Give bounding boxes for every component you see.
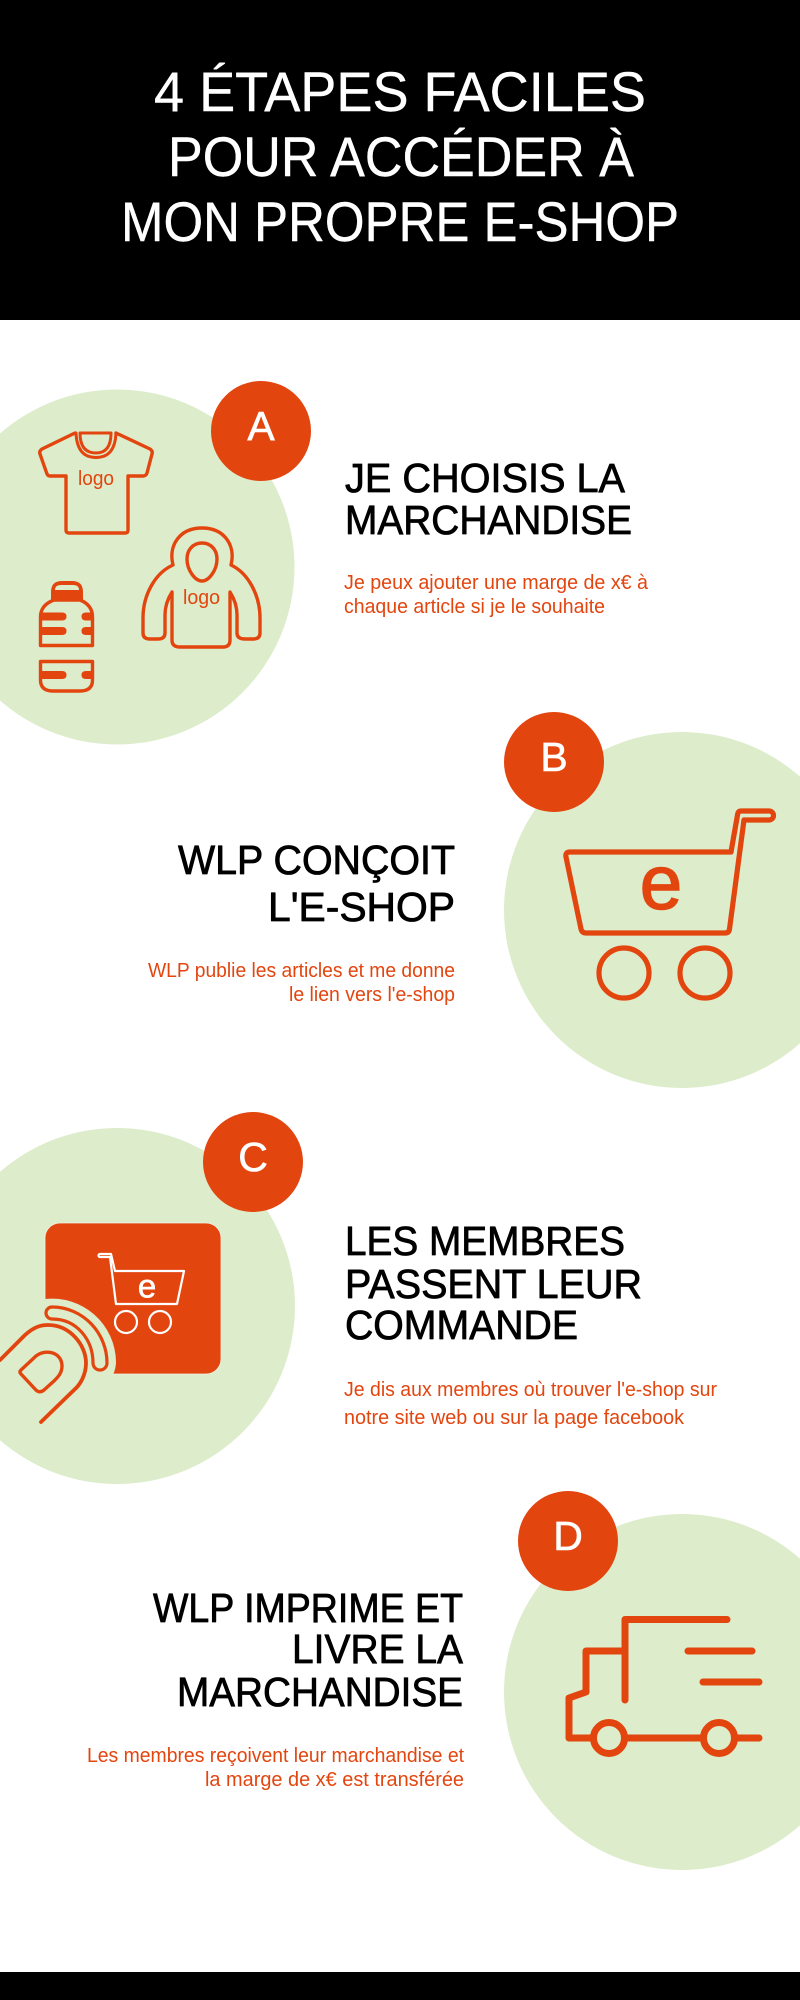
badge B: B xyxy=(540,734,568,780)
badge D xyxy=(518,1491,618,1591)
heading A: MARCHANDISE xyxy=(345,497,632,543)
heading D: MARCHANDISE xyxy=(177,1669,463,1715)
heading D: WLP IMPRIME ET xyxy=(153,1585,463,1631)
icon: phone screen with cart and finger: e xyxy=(138,1268,156,1304)
badge A xyxy=(211,381,311,481)
title xyxy=(121,60,679,253)
icon: t-shirt: logo xyxy=(78,468,114,490)
badge A: A xyxy=(247,403,275,449)
heading D xyxy=(153,1585,464,1715)
heading A xyxy=(345,455,632,543)
heading B: L'E-SHOP xyxy=(268,884,455,930)
icon: hoodie: logo xyxy=(183,587,220,609)
header band xyxy=(0,0,800,320)
icon: phone screen with cart and finger xyxy=(0,1223,221,1422)
heading C: LES MEMBRES xyxy=(345,1218,625,1264)
badge D: D xyxy=(553,1513,583,1559)
green circle C xyxy=(0,1128,295,1484)
panel: step A xyxy=(0,381,649,744)
text A xyxy=(344,572,649,618)
heading A: JE CHOISIS LA xyxy=(345,455,626,501)
badge B xyxy=(504,712,604,812)
text D xyxy=(87,1745,464,1791)
icon: delivery truck xyxy=(569,1620,759,1754)
icon: shopping cart xyxy=(566,811,774,998)
title: MON PROPRE E-SHOP xyxy=(121,190,679,253)
text C: Je dis aux membres où trouver l'e-shop sur xyxy=(344,1379,717,1401)
heading B: WLP CONÇOIT xyxy=(178,837,455,883)
text D: Les membres reçoivent leur marchandise et xyxy=(87,1745,464,1767)
icon: shopping cart: e xyxy=(640,841,682,926)
text B xyxy=(148,960,455,1006)
panel: step B xyxy=(148,712,800,1088)
green circle A xyxy=(0,390,294,744)
icon: t-shirt xyxy=(40,433,152,533)
badge C xyxy=(203,1112,303,1212)
text C: notre site web ou sur la page facebook xyxy=(344,1407,685,1429)
badge C: C xyxy=(238,1134,268,1180)
title: 4 ÉTAPES FACILES xyxy=(154,60,646,123)
icon: water bottle xyxy=(40,581,93,691)
heading C: COMMANDE xyxy=(345,1302,578,1348)
heading B xyxy=(178,837,455,930)
text A: Je peux ajouter une marge de x€ à xyxy=(344,572,649,594)
green circle D xyxy=(504,1514,800,1870)
heading C: PASSENT LEUR xyxy=(345,1261,642,1307)
text B: WLP publie les articles et me donne xyxy=(148,960,455,982)
text A: chaque article si je le souhaite xyxy=(344,596,605,618)
text C xyxy=(344,1379,717,1429)
panel: step C xyxy=(0,1112,717,1484)
icon: hoodie xyxy=(143,528,260,647)
footer band xyxy=(0,1972,800,2000)
heading C xyxy=(345,1218,642,1348)
text B: le lien vers l'e-shop xyxy=(289,984,455,1006)
text D: la marge de x€ est transférée xyxy=(205,1769,464,1791)
panel: step D xyxy=(87,1491,800,1870)
title: POUR ACCÉDER À xyxy=(168,125,635,188)
green circle B xyxy=(504,732,800,1088)
heading D: LIVRE LA xyxy=(292,1626,464,1672)
